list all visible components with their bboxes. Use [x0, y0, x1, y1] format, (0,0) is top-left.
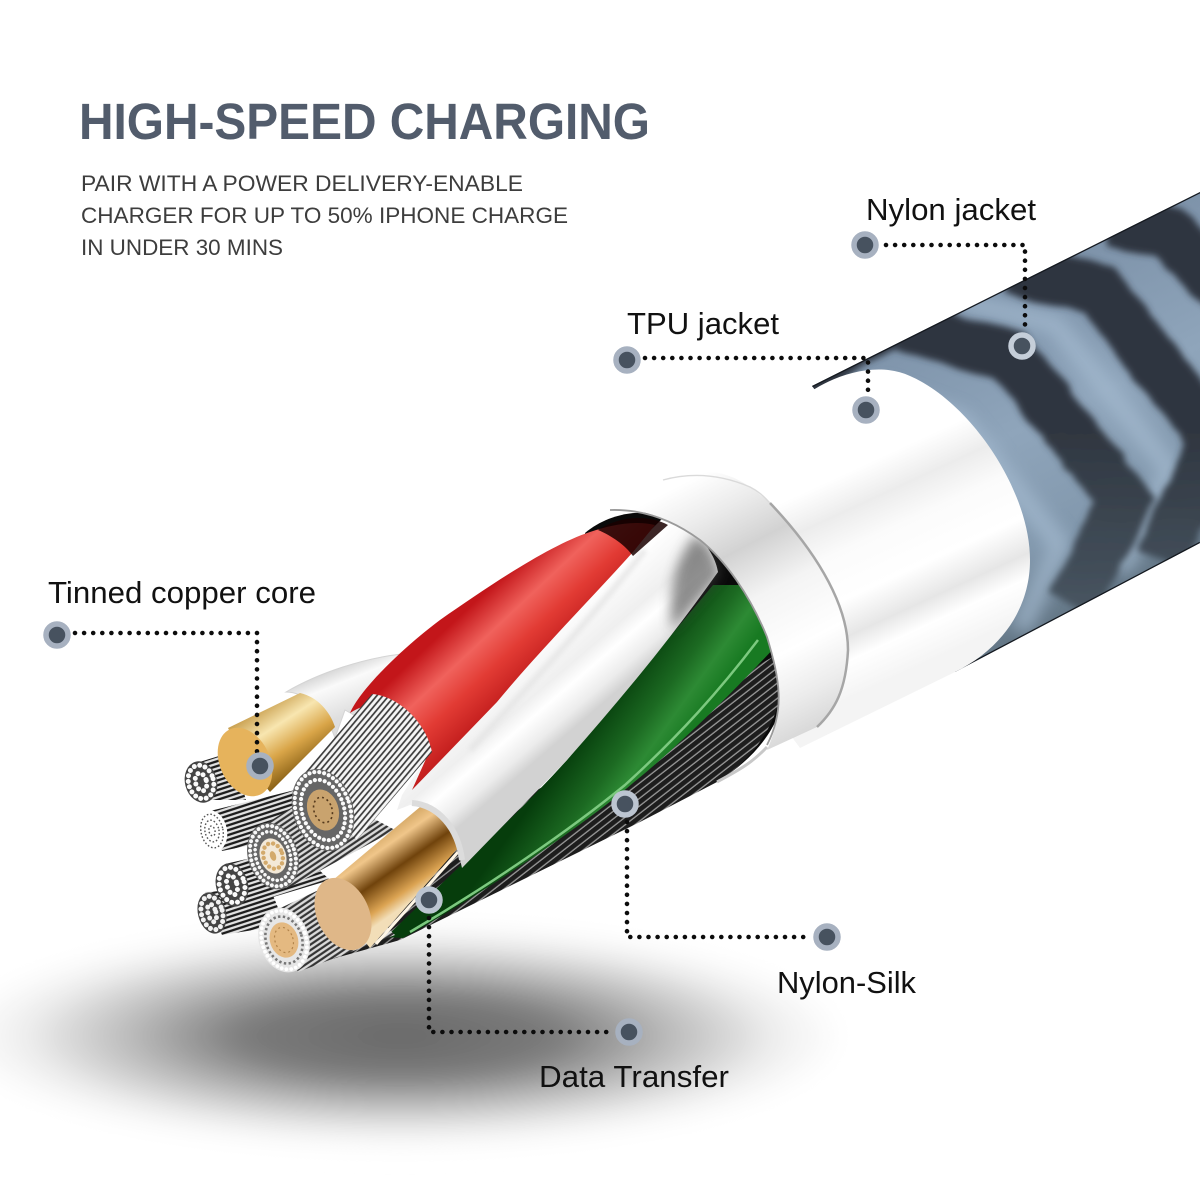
dot: data transfer end [618, 1021, 640, 1043]
strands: middle left [211, 848, 330, 910]
white sleeve behind gold tip [286, 654, 425, 738]
label: nylon-silk: Nylon-Silk [777, 965, 916, 1000]
strands: rear left [180, 752, 246, 806]
leader: data transfer [429, 918, 612, 1032]
dot: nylon jacket end [1011, 335, 1033, 357]
leader lines [75, 245, 1025, 1032]
strands: front with copper core [250, 880, 395, 979]
red wire inner shadow [598, 518, 668, 556]
dot: copper core start [46, 624, 68, 646]
cable interior [585, 513, 785, 782]
label: TPU jacket: TPU jacket [627, 306, 779, 341]
collar lower lip [717, 747, 767, 782]
silver collar [610, 472, 848, 750]
TPU jacket [660, 369, 1030, 748]
subtitle: PAIR WITH A POWER DELIVERY-ENABLE [81, 171, 523, 196]
marker dots [46, 234, 1033, 1043]
dot: copper core end [249, 755, 271, 777]
red wire strand bundle [281, 694, 432, 859]
strands: centre with copper core [239, 790, 395, 896]
title: HIGH-SPEED CHARGING [79, 93, 650, 150]
strands: lower left [193, 888, 285, 937]
dot: nylon-silk start [614, 793, 636, 815]
ground shadow [0, 924, 845, 1148]
label: nylon jacket: Nylon jacket [866, 192, 1036, 227]
cable illustration [180, 180, 1200, 979]
green wire [386, 585, 775, 938]
strands: upper left [193, 790, 325, 855]
label: data transfer: Data Transfer [539, 1059, 729, 1094]
gold tip, lower [303, 803, 462, 959]
nylon braided jacket [812, 192, 1200, 672]
leader: TPU jacket [645, 358, 868, 396]
nylon-silk filler [300, 650, 785, 968]
gold tip, upper [207, 693, 335, 805]
dot: nylon-silk end [816, 926, 838, 948]
white data wire [397, 518, 720, 868]
label: tinned copper core: Tinned copper core [48, 575, 316, 610]
leader: nylon-silk [627, 822, 810, 937]
collar opening rim [610, 510, 779, 745]
dot: TPU jacket start [616, 349, 638, 371]
subtitle [81, 171, 568, 260]
subtitle: IN UNDER 30 MINS [81, 235, 283, 260]
leader: nylon jacket [886, 245, 1025, 332]
dot: nylon jacket start [854, 234, 876, 256]
leader: tinned copper core [75, 633, 257, 752]
subtitle: CHARGER FOR UP TO 50% IPHONE CHARGE [81, 203, 568, 228]
collar top edge [663, 476, 770, 503]
dot: TPU jacket end [855, 399, 877, 421]
collar edge [770, 503, 848, 727]
red wire [350, 523, 655, 790]
dot: data transfer start [418, 889, 440, 911]
